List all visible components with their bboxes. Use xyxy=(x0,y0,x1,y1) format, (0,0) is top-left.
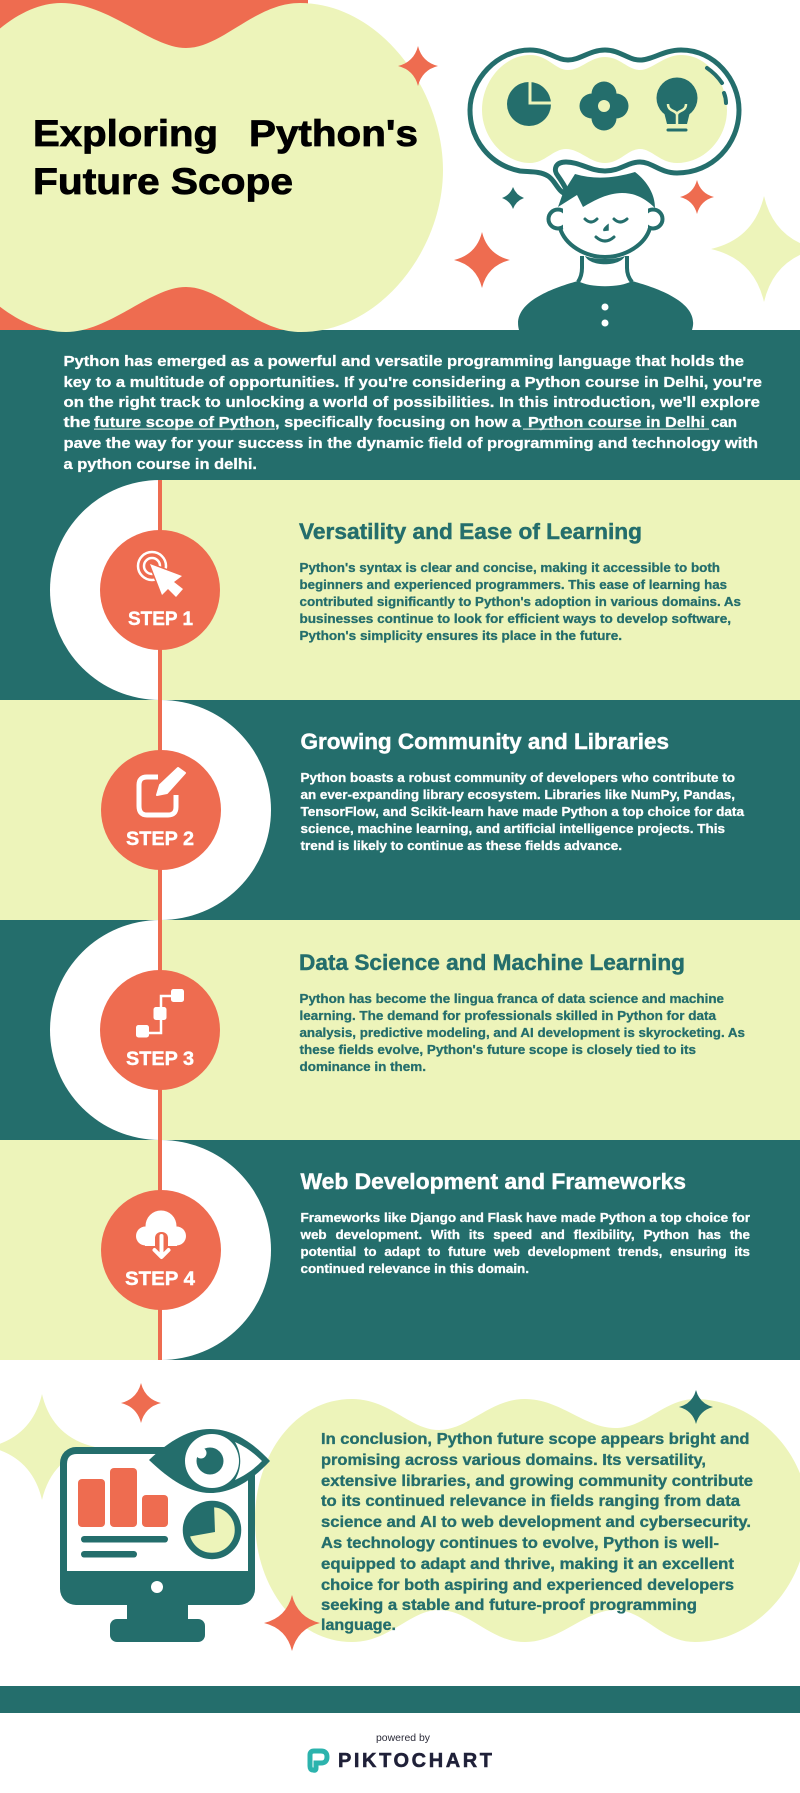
conclusion text: In conclusion, Python future scope appears bright and xyxy=(321,1431,750,1448)
cream title blob xyxy=(0,3,443,332)
panel: header xyxy=(0,0,800,480)
body text: TensorFlow, and Scikit-learn have made Python a top choice for data xyxy=(300,804,745,819)
body text: potential to adapt to future web development trends, ensuring its xyxy=(300,1244,750,1259)
bubble outline xyxy=(470,50,739,194)
ears xyxy=(548,210,662,228)
icon: sparkle cream large xyxy=(0,1394,95,1500)
person body xyxy=(518,281,693,330)
text block: introduction: the xyxy=(64,414,90,431)
row background xyxy=(0,700,160,920)
icon: sparkle cream large xyxy=(711,196,800,302)
monitor screen xyxy=(67,1454,248,1571)
body text xyxy=(300,991,745,1074)
monitor frame xyxy=(60,1447,255,1605)
panel: step 4 xyxy=(0,1140,800,1360)
body text: science, machine learning, and artificial intelligence projects. This xyxy=(300,821,725,836)
title xyxy=(33,113,418,202)
body text: Python's syntax is clear and concise, making it accessible to both xyxy=(300,560,720,575)
panel: conclusion xyxy=(0,1383,800,1651)
body text: analysis, predictive modeling, and AI development is skyrocketing. As xyxy=(300,1025,745,1040)
heading: Growing Community and Libraries xyxy=(300,729,669,754)
body text: Frameworks like Django and Flask have made Python a top choice for xyxy=(300,1210,750,1225)
icon: flower xyxy=(580,82,628,130)
body text: learning. The demand for professionals skilled in Python for data xyxy=(300,1008,717,1023)
conclusion text: extensive libraries, and growing community contribute xyxy=(321,1473,753,1490)
badge: step 2 xyxy=(101,750,221,870)
cream conclusion blob xyxy=(255,1399,800,1642)
body text: businesses continue to look for efficient ways to develop software, xyxy=(300,611,731,626)
body text: continued relevance in this domain. xyxy=(300,1261,529,1276)
icon: pie chart xyxy=(507,80,553,126)
powered by: powered by xyxy=(376,1732,431,1744)
bubble highlight xyxy=(707,68,726,103)
neck xyxy=(578,256,632,282)
intro background band xyxy=(0,330,800,480)
monitor base xyxy=(110,1619,205,1642)
text block: introduction: a python course in delhi. xyxy=(64,456,257,473)
footer: Piktochart credit xyxy=(310,1732,492,1772)
text block: introduction xyxy=(64,353,762,473)
white half circle xyxy=(50,920,160,1140)
icon: sparkle orange large xyxy=(264,1595,320,1651)
text block: introduction: Python course in Delhi xyxy=(528,414,705,431)
text block: introduction: future scope of Python xyxy=(94,414,275,431)
title: Future Scope xyxy=(33,161,293,202)
icon: sparkle teal xyxy=(679,1390,713,1424)
body text xyxy=(299,1210,750,1276)
text block: introduction: on the right track to unlocking a world of possibilities. In this introduction, we'll explore xyxy=(64,394,760,411)
logo mark xyxy=(310,1751,327,1770)
body text: these fields evolve, Python's future scope is closely tied to its xyxy=(300,1042,696,1057)
icon: edit xyxy=(139,768,185,815)
text block: introduction: Python has emerged as a powerful and versatile programming language that holds the xyxy=(64,353,744,370)
white half circle xyxy=(50,480,160,700)
body text: beginners and experienced programmers. This ease of learning has xyxy=(300,577,727,592)
text block: introduction: can xyxy=(711,414,737,431)
conclusion text: As technology continues to evolve, Python is well- xyxy=(321,1535,719,1552)
conclusion text: language. xyxy=(321,1617,396,1634)
badge: step 4 xyxy=(101,1190,221,1310)
body text: web development. With its speed and flexibility, Python has the xyxy=(299,1227,750,1242)
timeline line xyxy=(158,480,162,1360)
icon: sparkle orange large xyxy=(454,232,510,288)
row background xyxy=(0,480,160,700)
step label: STEP 3 xyxy=(126,1049,194,1070)
badge: step 1 xyxy=(100,530,220,650)
neck shadow xyxy=(585,256,625,264)
body text: Python boasts a robust community of developers who contribute to xyxy=(300,770,735,785)
body text: Python's simplicity ensures its place in the future. xyxy=(300,628,622,643)
icon: eye xyxy=(149,1429,270,1493)
hair xyxy=(558,172,655,208)
pie chart xyxy=(186,1504,238,1556)
monitor stand xyxy=(127,1604,188,1621)
conclusion text: choice for both aspiring and experienced developers xyxy=(321,1577,734,1594)
conclusion text: promising across various domains. Its versatility, xyxy=(321,1452,706,1469)
white half circle xyxy=(161,700,271,920)
row background xyxy=(0,1140,160,1360)
body text: contributed significantly to Python's adoption in various domains. As xyxy=(300,594,741,609)
heading: Versatility and Ease of Learning xyxy=(299,519,642,544)
text block: introduction: pave the way for your success in the dynamic field of programming and technology with xyxy=(64,435,758,452)
logo wordmark: PIKTOCHART xyxy=(338,1750,492,1772)
body text xyxy=(300,560,741,643)
illustration: thought bubble xyxy=(470,50,739,194)
body text xyxy=(300,770,745,853)
body text: trend is likely to continue as these fields advance. xyxy=(300,838,622,853)
heading: Data Science and Machine Learning xyxy=(299,950,685,975)
face xyxy=(563,203,648,257)
panel: step 2 xyxy=(0,700,800,920)
jaw outline xyxy=(560,228,650,257)
icon: cloud download xyxy=(136,1210,186,1264)
title: Python's xyxy=(249,113,418,154)
bubble cream fill xyxy=(482,55,727,163)
title: Exploring xyxy=(33,113,218,154)
body text: dominance in them. xyxy=(300,1059,426,1074)
icon: workflow nodes xyxy=(136,989,184,1038)
illustration: monitor xyxy=(60,1429,270,1642)
conclusion text: equipped to adapt and thrive, making it an excellent xyxy=(321,1556,734,1573)
icon: sparkle teal small xyxy=(502,187,524,209)
illustration: person xyxy=(518,172,693,330)
bar chart xyxy=(78,1468,168,1527)
power dot xyxy=(151,1581,163,1593)
panel: step 3 xyxy=(0,920,800,1140)
orange bottom band xyxy=(0,280,290,332)
body text: an ever-expanding library ecosystem. Libraries like NumPy, Pandas, xyxy=(300,787,735,802)
text block: introduction: , specifically focusing on how a xyxy=(275,414,522,431)
facial features xyxy=(585,219,627,241)
orange top band xyxy=(0,0,308,60)
conclusion text: to its continued relevance in fields ranging from data xyxy=(321,1493,740,1510)
icon: sparkle orange xyxy=(121,1383,161,1423)
icon: sparkle orange top xyxy=(398,46,438,86)
conclusion text: science and AI to web development and cybersecurity. xyxy=(321,1514,751,1531)
icon: light bulb xyxy=(656,78,698,130)
icon: cursor click xyxy=(138,552,183,597)
icon: sparkle orange right xyxy=(680,180,714,214)
step label: STEP 4 xyxy=(125,1269,195,1290)
body text: Python has become the lingua franca of data science and machine xyxy=(300,991,724,1006)
text block: introduction: key to a multitude of opportunities. If you're considering a Python course in Delhi, you're xyxy=(64,374,762,391)
heading: Web Development and Frameworks xyxy=(300,1169,686,1194)
step label: STEP 2 xyxy=(126,829,194,850)
row background xyxy=(0,920,160,1140)
footer bar xyxy=(0,1686,800,1713)
badge: step 3 xyxy=(100,970,220,1090)
text lines xyxy=(81,1536,168,1558)
conclusion text: seeking a stable and future-proof programming xyxy=(321,1597,697,1614)
conclusion text xyxy=(321,1431,753,1634)
step label: STEP 1 xyxy=(128,609,193,630)
shirt buttons xyxy=(602,304,608,326)
white half circle xyxy=(161,1140,271,1360)
panel: step 1 xyxy=(0,480,800,700)
